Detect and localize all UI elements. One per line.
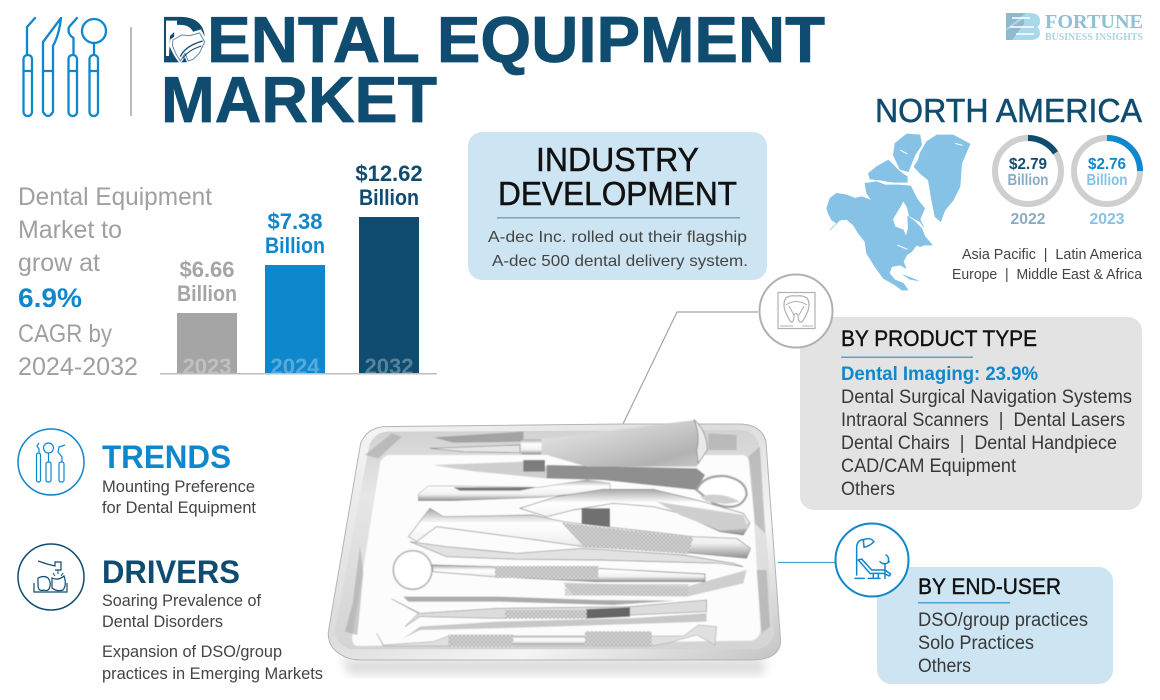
heading and text: drivers: Expansion of DSO/group <box>102 643 282 661</box>
text: market growth statement <box>18 183 212 381</box>
panel: by product type: BY PRODUCT TYPE <box>841 326 1037 351</box>
heading and text: drivers: DRIVERS <box>102 554 240 590</box>
donut: 2023: Billion <box>1086 172 1128 189</box>
bar: 2032: $12.62 <box>355 161 423 186</box>
bar: 2032: 2032 <box>365 354 413 379</box>
connector: product type to tray <box>622 312 758 426</box>
bar: 2023: $6.66 <box>179 257 235 282</box>
heading and text: drivers: Soaring Prevalence of <box>102 592 261 610</box>
panel: by end-user: BY END-USER <box>918 574 1061 599</box>
panel: industry development <box>468 132 767 280</box>
panel: industry development: A-dec 500 dental delivery system. <box>492 253 748 270</box>
bar chart: market size <box>160 161 437 379</box>
bar: 2032: Billion <box>359 185 419 210</box>
text: market growth statement: Dental Equipment <box>18 183 212 211</box>
icon: dental chair <box>836 524 908 596</box>
text: market growth statement: grow at <box>18 249 100 277</box>
donut: 2022: Billion <box>1008 172 1048 189</box>
panel: industry development: INDUSTRY <box>536 141 699 178</box>
donut: 2023 <box>1074 138 1140 228</box>
panel: by product type: Others <box>841 479 895 500</box>
bar: 2024: 2024 <box>271 354 320 379</box>
bar: 2023: Billion <box>177 281 237 306</box>
icon: dental imaging <box>760 274 832 348</box>
text: market growth statement: 6.9% <box>18 283 82 313</box>
connector: end-user to tray <box>778 562 836 564</box>
heading and text: trends <box>102 439 256 517</box>
panel: by product type: Dental Surgical Navigation Systems <box>841 387 1132 408</box>
logo: Fortune Business Insights <box>1006 11 1143 43</box>
icon: tooth in title <box>166 21 208 64</box>
donut: 2022: $2.79 <box>1009 156 1047 173</box>
heading and text: drivers <box>102 554 323 683</box>
text: other regions: Europe | Middle East & Africa <box>952 267 1143 283</box>
heading and text: drivers: practices in Emerging Markets <box>102 665 323 683</box>
logo: Fortune Business Insights: BUSINESS INSIGHTS <box>1045 32 1143 43</box>
title: DENTAL EQUIPMENT <box>160 3 825 76</box>
panel: industry development: DEVELOPMENT <box>498 175 737 212</box>
logo: Fortune Business Insights: FORTUNE <box>1045 11 1143 33</box>
bar: 2024 <box>265 209 325 379</box>
donut: 2022 <box>995 138 1061 228</box>
panel: by product type: Dental Chairs | Dental Handpiece <box>841 433 1117 454</box>
icon: dental instruments <box>24 18 106 116</box>
image: steel tray with dental instruments <box>328 420 781 675</box>
divider: header <box>130 27 132 116</box>
heading: North America: NORTH AMERICA <box>875 92 1142 129</box>
bar: 2023 <box>177 257 237 379</box>
bar: 2024: $7.38 <box>267 209 323 234</box>
panel: by end-user <box>877 567 1113 684</box>
heading and text: trends: Mounting Preference <box>102 478 255 496</box>
map: North America <box>827 134 970 290</box>
donut: 2022: 2022 <box>1010 211 1046 228</box>
title <box>160 3 825 136</box>
text: other regions: Asia Pacific | Latin America <box>962 247 1143 263</box>
heading and text: trends: TRENDS <box>102 439 231 475</box>
panel: by end-user: DSO/group practices <box>918 610 1088 631</box>
panel: by product type <box>800 317 1142 510</box>
icon: trends instruments <box>18 429 84 495</box>
text: market growth statement: CAGR by <box>18 320 112 348</box>
bar: 2032 <box>355 161 423 379</box>
icon: drivers tooth drill <box>18 544 84 610</box>
donut: 2023: $2.76 <box>1088 156 1126 173</box>
panel: by product type: Dental Imaging: 23.9% <box>841 364 1038 385</box>
bar: 2023: 2023 <box>183 354 231 379</box>
panel: by product type: CAD/CAM Equipment <box>841 456 1017 477</box>
bar: 2024: Billion <box>265 233 325 258</box>
title: MARKET <box>161 63 437 136</box>
text: other regions <box>952 247 1143 283</box>
panel: industry development: A-dec Inc. rolled out their flagship <box>488 229 747 246</box>
text: market growth statement: 2024-2032 <box>18 353 138 381</box>
donut: 2023: 2023 <box>1090 211 1125 228</box>
panel: by end-user: Others <box>918 656 971 677</box>
text: market growth statement: Market to <box>18 216 122 244</box>
heading and text: drivers: Dental Disorders <box>102 613 223 631</box>
heading and text: trends: for Dental Equipment <box>102 499 256 517</box>
panel: by product type: Intraoral Scanners | Dental Lasers <box>841 410 1125 431</box>
panel: by end-user: Solo Practices <box>918 633 1034 654</box>
